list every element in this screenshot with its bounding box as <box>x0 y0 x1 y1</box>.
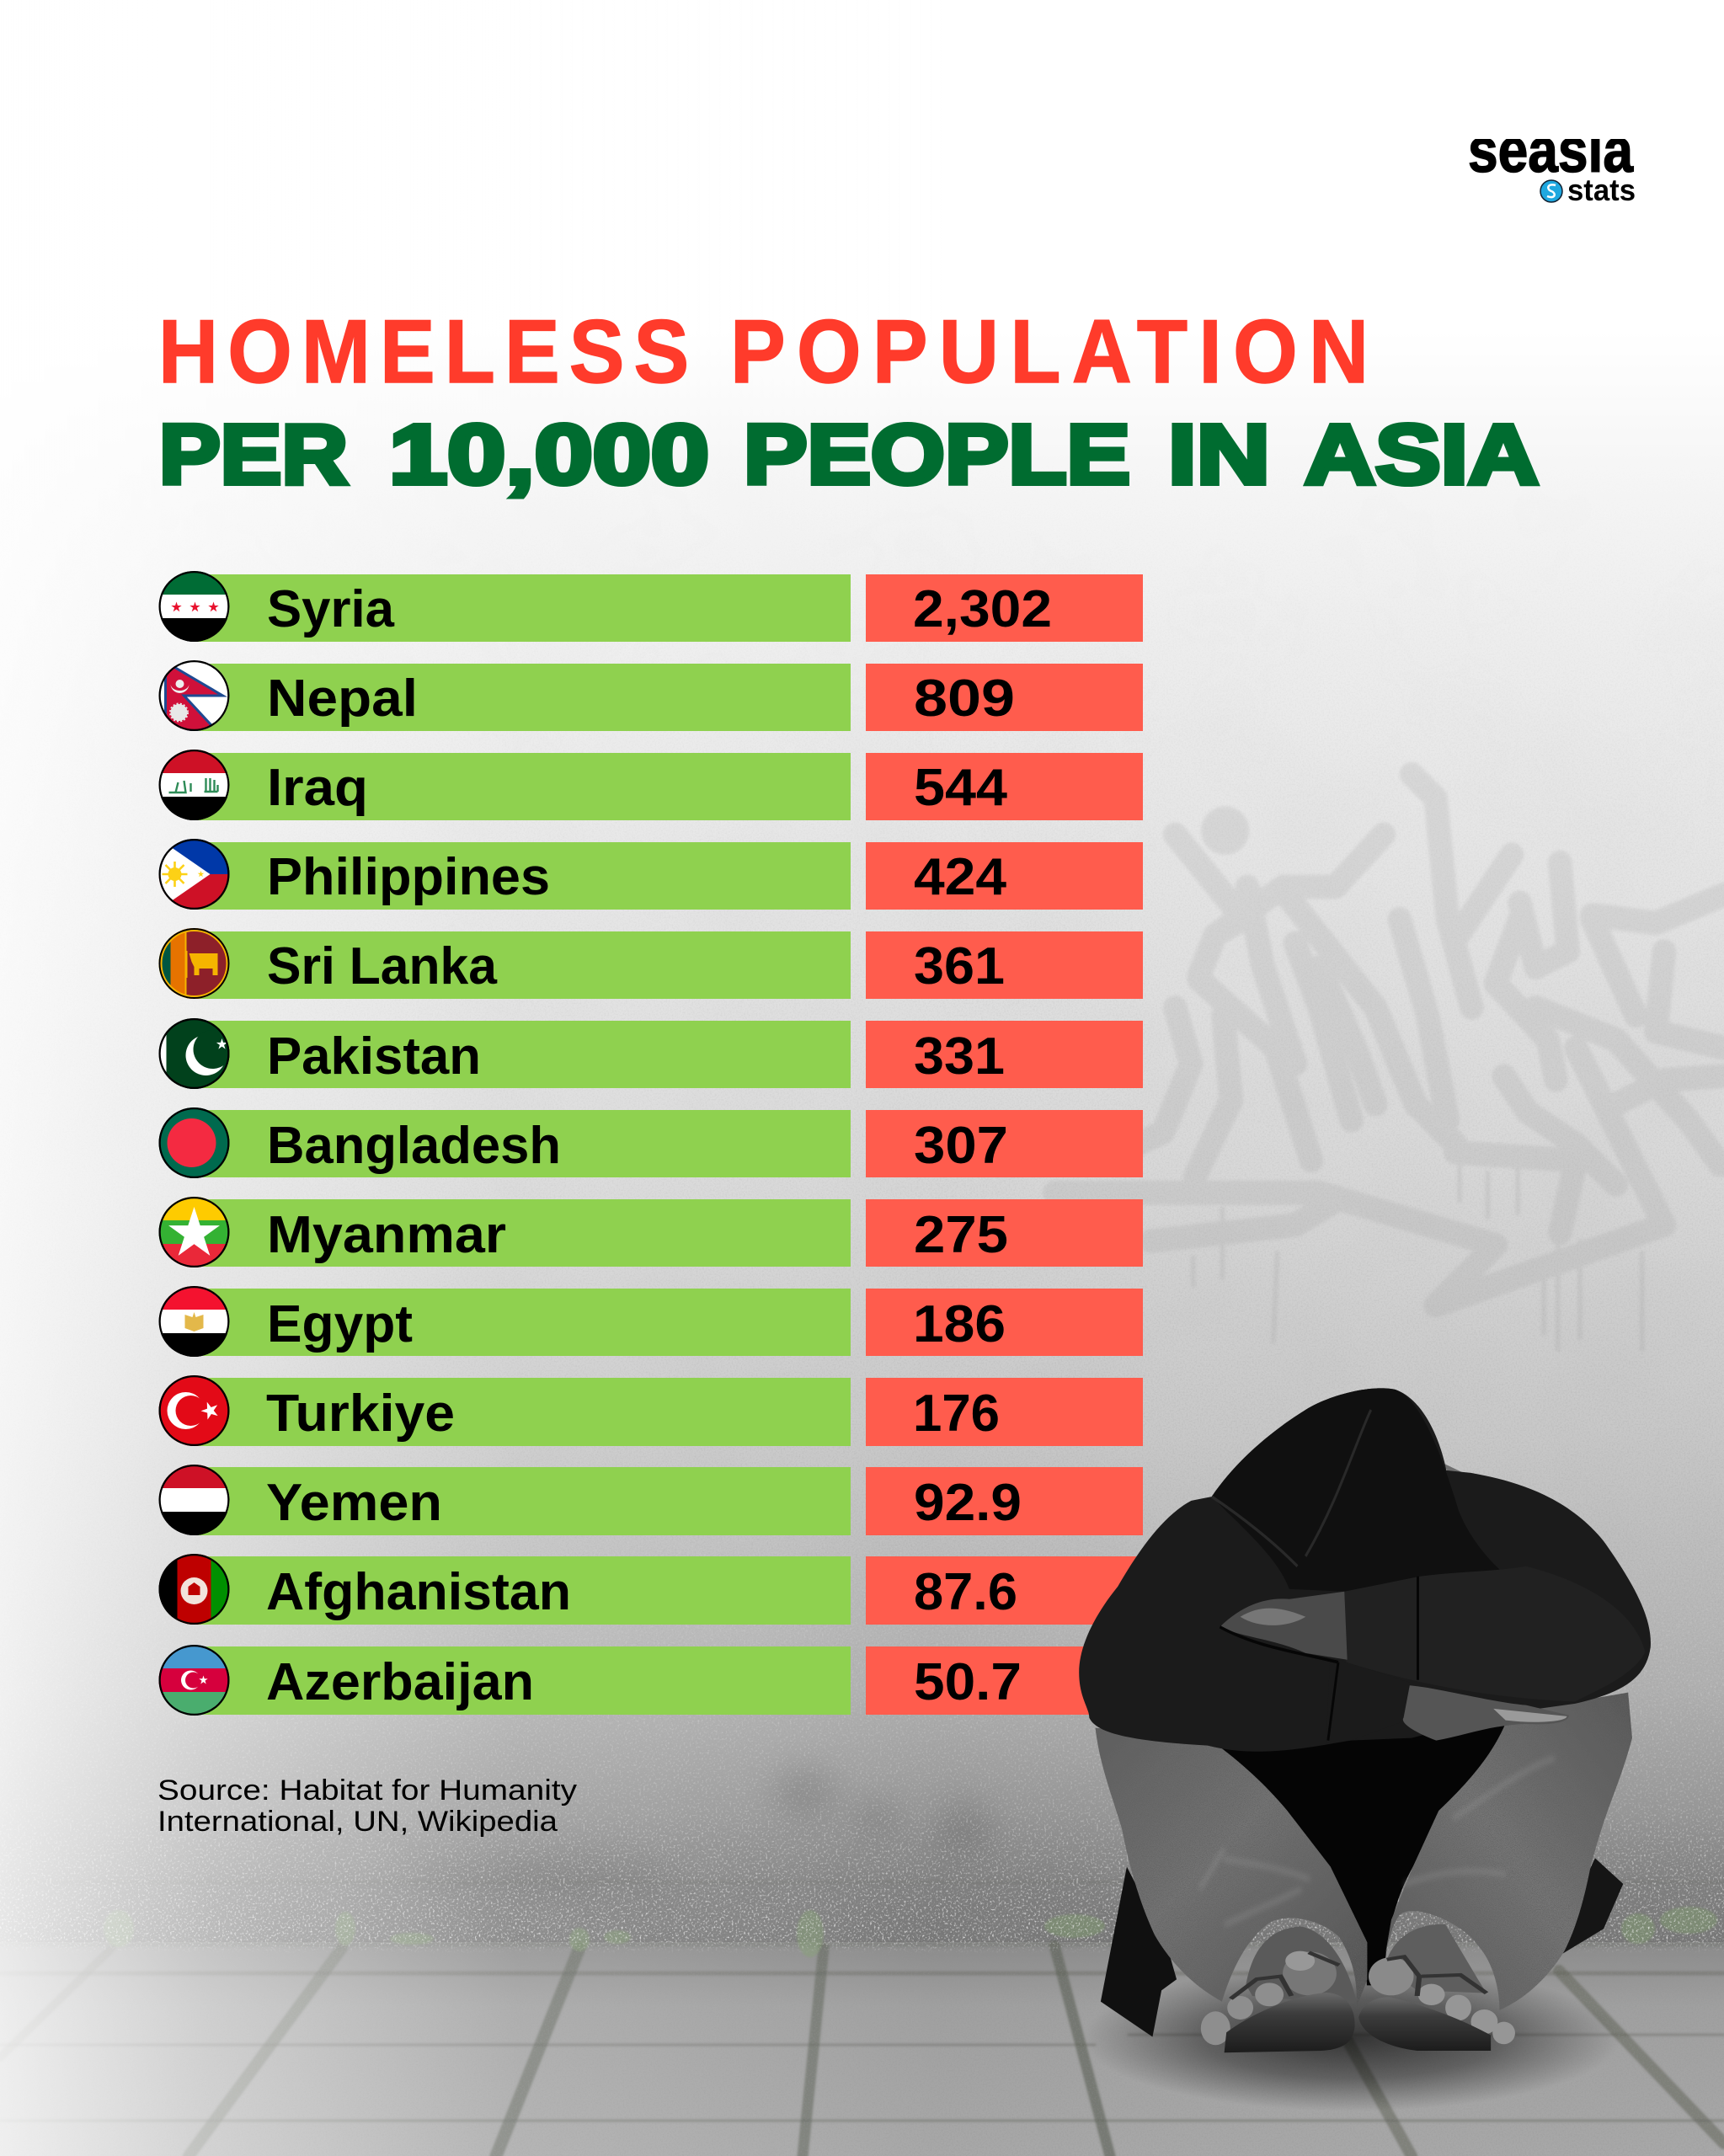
row: Turkiye <box>194 1378 1143 1446</box>
background: weeds along the kerb <box>104 1907 1717 1957</box>
row: Azerbaijan: Azerbaijan <box>266 1653 534 1711</box>
left sandal <box>1225 1993 1355 2052</box>
hood seam <box>1212 1410 1371 1566</box>
icon: flag of Egypt <box>158 1286 229 1357</box>
photo: person sitting hooded with head down <box>1079 1388 1651 2111</box>
feet and sandals <box>1201 1924 1515 2052</box>
source note <box>157 1774 577 1838</box>
background: surface grain and fog <box>0 487 1724 2156</box>
row: Pakistan: Pakistan <box>267 1027 481 1086</box>
icon: flag of Syria <box>158 571 229 642</box>
row: Egypt: Egypt <box>267 1295 413 1353</box>
row: Iraq: 544 <box>914 759 1008 817</box>
row: Yemen: Yemen <box>266 1474 442 1532</box>
jeans and hoodie <box>1079 1388 1651 2010</box>
logo wordmark: seasia <box>1468 115 1634 185</box>
row: Iraq: Iraq <box>267 759 368 817</box>
icon: flag of Nepal <box>158 660 229 733</box>
row: Nepal: 809 <box>914 670 1015 728</box>
icon: flag of the Philippines <box>141 827 229 921</box>
row: Sri Lanka <box>194 931 1143 999</box>
row: Yemen <box>194 1467 1143 1535</box>
title line 2 <box>159 408 1539 502</box>
row: Egypt: 186 <box>913 1295 1006 1353</box>
row: Bangladesh: Bangladesh <box>267 1117 561 1175</box>
row: Turkiye: Turkiye <box>266 1385 455 1443</box>
row: Afghanistan: Afghanistan <box>266 1563 571 1621</box>
icon: flag of Pakistan <box>158 1018 232 1089</box>
row: Azerbaijan <box>194 1646 1143 1715</box>
logo: seasia stats <box>1469 139 1635 203</box>
lower hand highlight <box>1493 1709 1567 1722</box>
row: Pakistan <box>194 1021 1143 1088</box>
row: Sri Lanka: 361 <box>914 937 1005 995</box>
title line 1: POPULATION <box>730 301 1369 402</box>
icon: flag of Turkiye <box>158 1375 229 1446</box>
figure upper layers <box>1101 1713 1623 2037</box>
row: Yemen: 92.9 <box>914 1474 1022 1532</box>
row: Nepal: Nepal <box>267 670 418 728</box>
row: Turkiye: 176 <box>913 1385 1000 1443</box>
row: Myanmar: 275 <box>914 1206 1008 1264</box>
row: Sri Lanka: Sri Lanka <box>267 937 498 995</box>
left ankle <box>1246 1926 1357 2004</box>
right toes <box>1418 1984 1515 2044</box>
source note: International, UN, Wikipedia <box>157 1806 558 1838</box>
title line 2: PER <box>159 408 348 502</box>
title line 1 <box>158 301 1369 402</box>
icon: flag of Yemen <box>158 1465 229 1535</box>
icon: flag of Iraq <box>158 750 229 820</box>
title line 2: IN <box>1168 408 1270 502</box>
row: Bangladesh: 307 <box>914 1117 1008 1175</box>
jeans right leg <box>1385 1693 1632 2010</box>
hoodie hem left <box>1101 1867 1177 2037</box>
row: Myanmar: Myanmar <box>267 1206 506 1264</box>
logo subtitle: stats <box>1567 173 1636 207</box>
row: Afghanistan: 87.6 <box>914 1563 1017 1621</box>
background: concrete wall <box>0 453 1724 2156</box>
background: pavement slabs <box>0 1882 1724 2156</box>
row: Syria: Syria <box>267 580 395 638</box>
jeans left leg <box>1096 1728 1367 2007</box>
jeans folds <box>1199 1758 1555 1924</box>
background: graffiti on wall <box>1054 774 1723 1350</box>
row: Bangladesh <box>194 1110 1143 1177</box>
title line 2: 10,000 <box>389 408 709 502</box>
icon: flag of Myanmar <box>158 1197 229 1267</box>
left lower sleeve cuff <box>1326 1657 1410 1743</box>
hoodie hem right <box>1551 1858 1623 1955</box>
icon: flag of Azerbaijan <box>158 1645 229 1716</box>
title line 2: PEOPLE <box>744 408 1130 502</box>
shadow under person <box>1083 1965 1621 2111</box>
row: Pakistan: 331 <box>914 1027 1005 1086</box>
row: Azerbaijan: 50.7 <box>914 1653 1022 1711</box>
background: wall stains <box>421 1769 991 1897</box>
upper hand highlight <box>1241 1609 1305 1625</box>
icon: flag of Bangladesh <box>158 1107 229 1178</box>
row: Afghanistan <box>194 1556 1143 1625</box>
lower hand <box>1403 1685 1569 1741</box>
hood <box>1212 1388 1502 1592</box>
left strap <box>1230 1952 1339 1999</box>
right foot top <box>1369 1957 1414 1995</box>
row: Philippines <box>194 842 1143 910</box>
backpack strap <box>1443 1463 1471 1516</box>
row: Syria: 2,302 <box>913 580 1052 638</box>
left toes <box>1201 1983 1284 2045</box>
row: Philippines: Philippines <box>267 848 550 906</box>
logo icon <box>1540 180 1562 202</box>
right sandal <box>1358 1997 1491 2051</box>
icon: flag of Sri Lanka <box>158 928 231 999</box>
right strap <box>1387 1956 1486 1996</box>
panel: ranking table <box>141 571 1143 1716</box>
icon: flag of Afghanistan <box>158 1554 229 1625</box>
title <box>158 301 1539 502</box>
right ankle <box>1385 1924 1486 1993</box>
source note: Source: Habitat for Humanity <box>157 1774 577 1806</box>
title line 2: ASIA <box>1305 408 1539 502</box>
hoodie body and arms <box>1079 1388 1651 1752</box>
dark torso <box>1208 1713 1510 1985</box>
row: Nepal <box>194 664 1143 731</box>
sleeve folds <box>1220 1577 1418 1741</box>
row: Myanmar <box>194 1199 1143 1267</box>
row: Egypt <box>194 1289 1143 1356</box>
title line 1: HOMELESS <box>158 301 689 402</box>
right upper sleeve <box>1344 1566 1645 1701</box>
row: Syria <box>194 574 1143 642</box>
row: Iraq <box>194 753 1143 820</box>
upper hand <box>1220 1592 1348 1660</box>
left foot top <box>1283 1951 1337 1995</box>
row: Philippines: 424 <box>914 848 1007 906</box>
